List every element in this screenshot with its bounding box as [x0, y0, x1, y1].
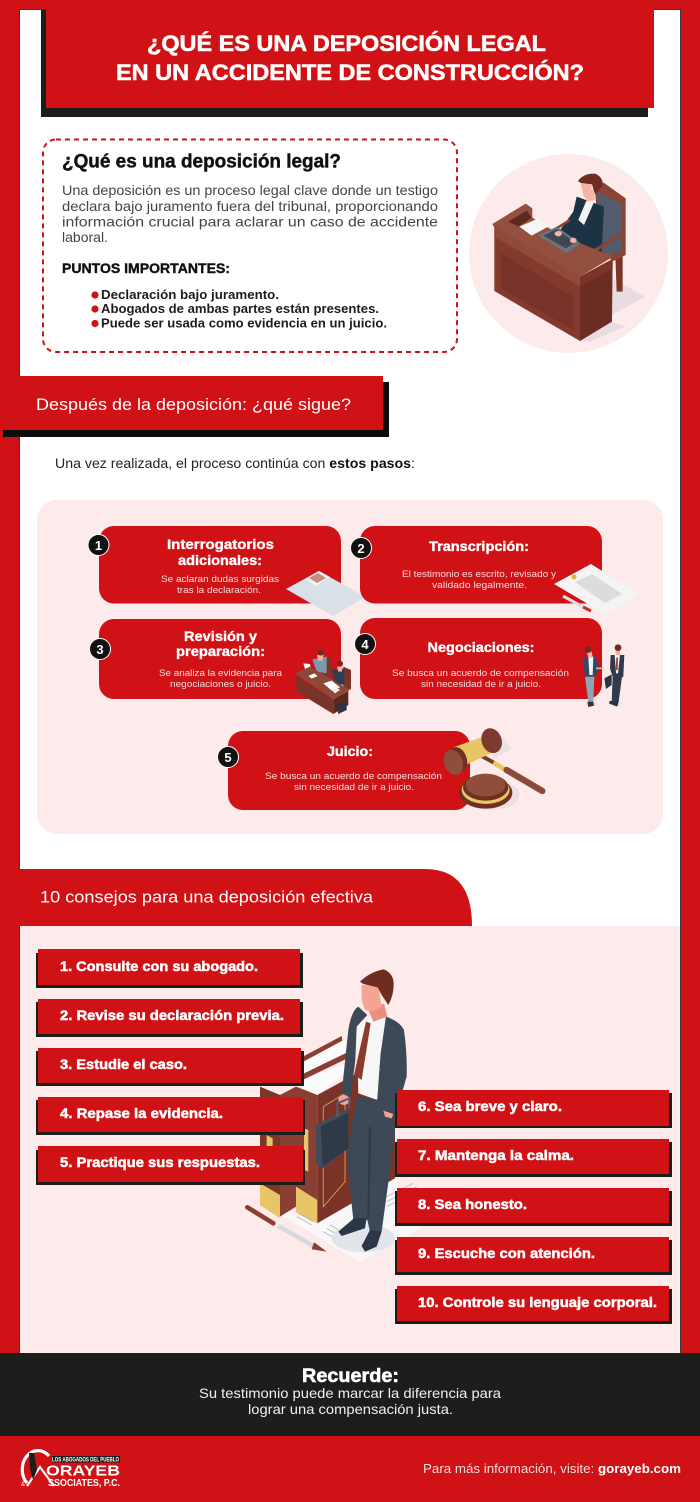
illustration: lawyer with books: [230, 969, 430, 1262]
step 5 card: Juicio:: [327, 744, 373, 759]
definition paragraph: [62, 182, 438, 245]
logo: Gorayeb and Associates: SSOCIATES, P.C.: [48, 1478, 120, 1489]
tip 1: [36, 949, 303, 988]
callout: remember: [0, 1353, 700, 1436]
step 1 card: Interrogatorios: [167, 537, 274, 552]
step 5 card: Se busca un acuerdo de compensación: [265, 771, 442, 782]
tip 8: [395, 1188, 672, 1226]
tip 4: [36, 1097, 305, 1135]
tip 2: [36, 999, 303, 1037]
definition paragraph: Una deposición es un proceso legal clave donde un testigo: [62, 182, 438, 198]
title banner: ¿QUÉ ES UNA DEPOSICIÓN LEGAL: [147, 31, 546, 56]
step 3 card: Se analiza la evidencia para: [159, 668, 283, 679]
callout: remember: lograr una compensación justa.: [248, 1401, 453, 1417]
tip 10: [395, 1286, 672, 1324]
definition paragraph: información crucial para aclarar un caso de accidente: [62, 214, 438, 230]
panel: what is a deposition: [43, 140, 457, 352]
tip 5: 5. Practique sus respuestas.: [60, 1155, 260, 1170]
step 1 card: [88, 526, 366, 616]
callout: remember: Recuerde:: [302, 1366, 399, 1387]
tip 3: [36, 1048, 304, 1086]
step 3 card: 3: [96, 642, 104, 657]
definition paragraph: declara bajo juramento fuera del tribunal, proporcionando: [62, 198, 438, 214]
step 4 card: sin necesidad de ir a juicio.: [421, 679, 541, 690]
step 5 card: [218, 725, 542, 810]
step 2 card: validado legalmente.: [432, 580, 527, 591]
key points list: [91, 287, 387, 330]
callout: remember: Su testimonio puede marcar la diferencia para: [199, 1385, 501, 1401]
section heading: ten tips: 10 consejos para una deposición efectiva: [40, 888, 374, 906]
heading: key points: PUNTOS IMPORTANTES:: [62, 260, 230, 276]
tip 8: 8. Sea honesto.: [418, 1197, 527, 1212]
tip 4: 4. Repase la evidencia.: [60, 1106, 223, 1121]
tip 2: 2. Revise su declaración previa.: [60, 1008, 284, 1023]
step 1 card: 1: [95, 538, 102, 553]
logo: Gorayeb and Associates: LOS ABOGADOS DEL PUEBLO: [52, 1458, 119, 1464]
title banner: [41, 0, 654, 117]
step 4 card: [354, 618, 624, 707]
tip 9: [395, 1237, 672, 1275]
section heading: ten tips: [0, 869, 472, 936]
step 4 card: Se busca un acuerdo de compensación: [392, 668, 569, 679]
tip 6: [395, 1090, 672, 1128]
logo: Gorayeb and Associates: ORAYEB: [46, 1464, 120, 1480]
step 1 card: Se aclaran dudas surgidas: [161, 574, 279, 585]
step 3 card: negociaciones o juicio.: [170, 679, 271, 690]
step 3 card: [90, 619, 351, 714]
tip 10: 10. Controle su lenguaje corporal.: [418, 1295, 657, 1310]
illustration: woman at court desk: [469, 154, 668, 353]
step 2 card: El testimonio es escrito, revisado y: [402, 569, 556, 580]
step 1 card: tras la declaración.: [177, 585, 261, 596]
panel: steps: [37, 500, 663, 834]
tip 6: 6. Sea breve y claro.: [418, 1099, 562, 1114]
step 3 card: preparación:: [176, 644, 265, 659]
key points list: Abogados de ambas partes están presentes.: [101, 301, 379, 316]
tip 9: 9. Escuche con atención.: [418, 1246, 595, 1261]
tips list: left column: [36, 949, 305, 1185]
tip 5: [36, 1146, 305, 1185]
title banner: EN UN ACCIDENTE DE CONSTRUCCIÓN?: [116, 60, 584, 85]
step 4 card: 4: [361, 637, 369, 652]
section heading: after the deposition: [0, 376, 389, 437]
tips list: right column: [395, 1090, 672, 1324]
tip 7: 7. Mantenga la calma.: [418, 1148, 574, 1163]
definition paragraph: laboral.: [62, 229, 108, 245]
footer: website: Para más información, visite: gorayeb.com: [423, 1461, 681, 1476]
step 4 card: Negociaciones:: [428, 640, 534, 655]
logo: Gorayeb and Associates: &: [21, 1482, 25, 1488]
step 3 card: Revisión y: [184, 629, 258, 644]
step 2 card: [350, 526, 639, 614]
tip 3: 3. Estudie el caso.: [60, 1057, 187, 1072]
step 5 card: sin necesidad de ir a juicio.: [294, 782, 414, 793]
tip 7: [395, 1139, 672, 1177]
intro text: next steps: Una vez realizada, el proceso continúa con estos pasos:: [55, 455, 415, 471]
icon: gavel: [440, 725, 542, 810]
section heading: after the deposition: Después de la deposición: ¿qué sigue?: [36, 395, 351, 414]
key points list: Puede ser usada como evidencia en un juicio.: [101, 316, 387, 330]
tip 1: 1. Consulte con su abogado.: [60, 959, 258, 974]
key points list: Declaración bajo juramento.: [101, 287, 279, 302]
step 1 card: adicionales:: [178, 553, 262, 568]
logo: Gorayeb and Associates: [21, 1451, 120, 1489]
step 2 card: Transcripción:: [429, 539, 529, 554]
step 2 card: 2: [357, 541, 365, 556]
panel: tips background: [20, 926, 680, 1353]
heading: what is a deposition: ¿Qué es una deposición legal?: [62, 152, 341, 172]
step 5 card: 5: [224, 750, 232, 765]
